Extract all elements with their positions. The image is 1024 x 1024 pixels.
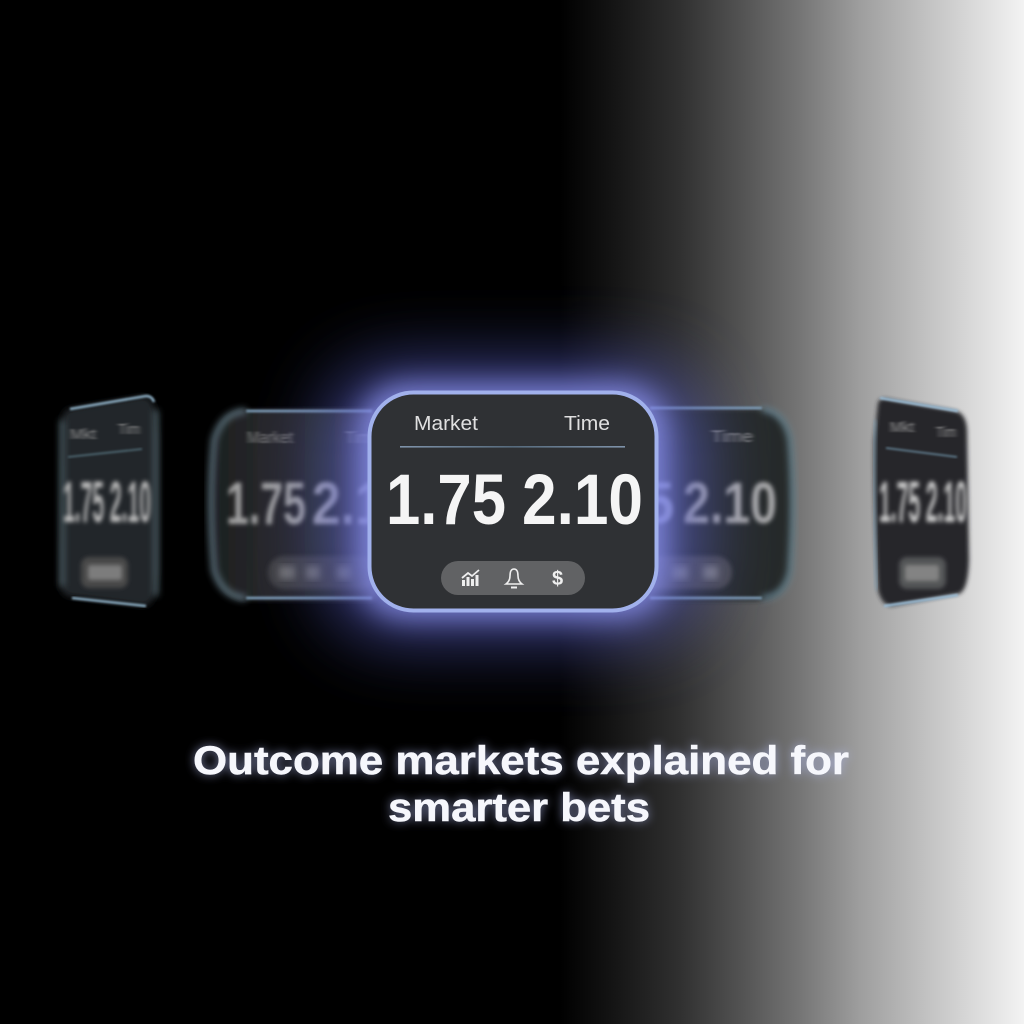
panel: middle left card: Time [345,428,381,447]
panel: middle left card: Market [247,428,293,447]
panel: middle left card: 2.1 [312,470,384,537]
panel: far left card [60,396,158,606]
panel: middle right card: 5 [642,471,674,536]
icon bar [441,561,585,595]
panel: middle left card [211,409,384,601]
title: Outcome markets explained for [193,739,849,783]
panel: far right card [874,398,969,606]
title: smarter bets [388,786,650,830]
title [193,739,849,830]
panel: middle right card: Time [711,427,753,446]
panel: centre card [370,392,656,610]
panel: far right card: Mkt [890,419,915,436]
infographic canvas: 1.75 2.10 [63,470,151,535]
column label: Time: Time [564,412,610,435]
title: Outcome markets explained for [193,739,849,783]
odds values [386,461,643,540]
panel: middle right card [630,408,792,601]
icon: chart [462,570,479,586]
panel: middle left card: 1.75 [226,470,306,537]
panel: far left card: Tim [118,421,140,438]
column label: Market: Market [414,412,478,435]
odds values: 2.10 [522,461,643,540]
odds values: 1.75 [386,461,506,540]
icon: bell [506,569,522,588]
panel: far left card: Mkt [70,426,97,443]
icon: dollar: $ [552,568,563,590]
glow behind centre card [325,365,701,637]
title: smarter bets [388,786,650,830]
panel: far right card: Tim [936,424,956,441]
panel: middle right card: 2.10 [683,471,777,536]
